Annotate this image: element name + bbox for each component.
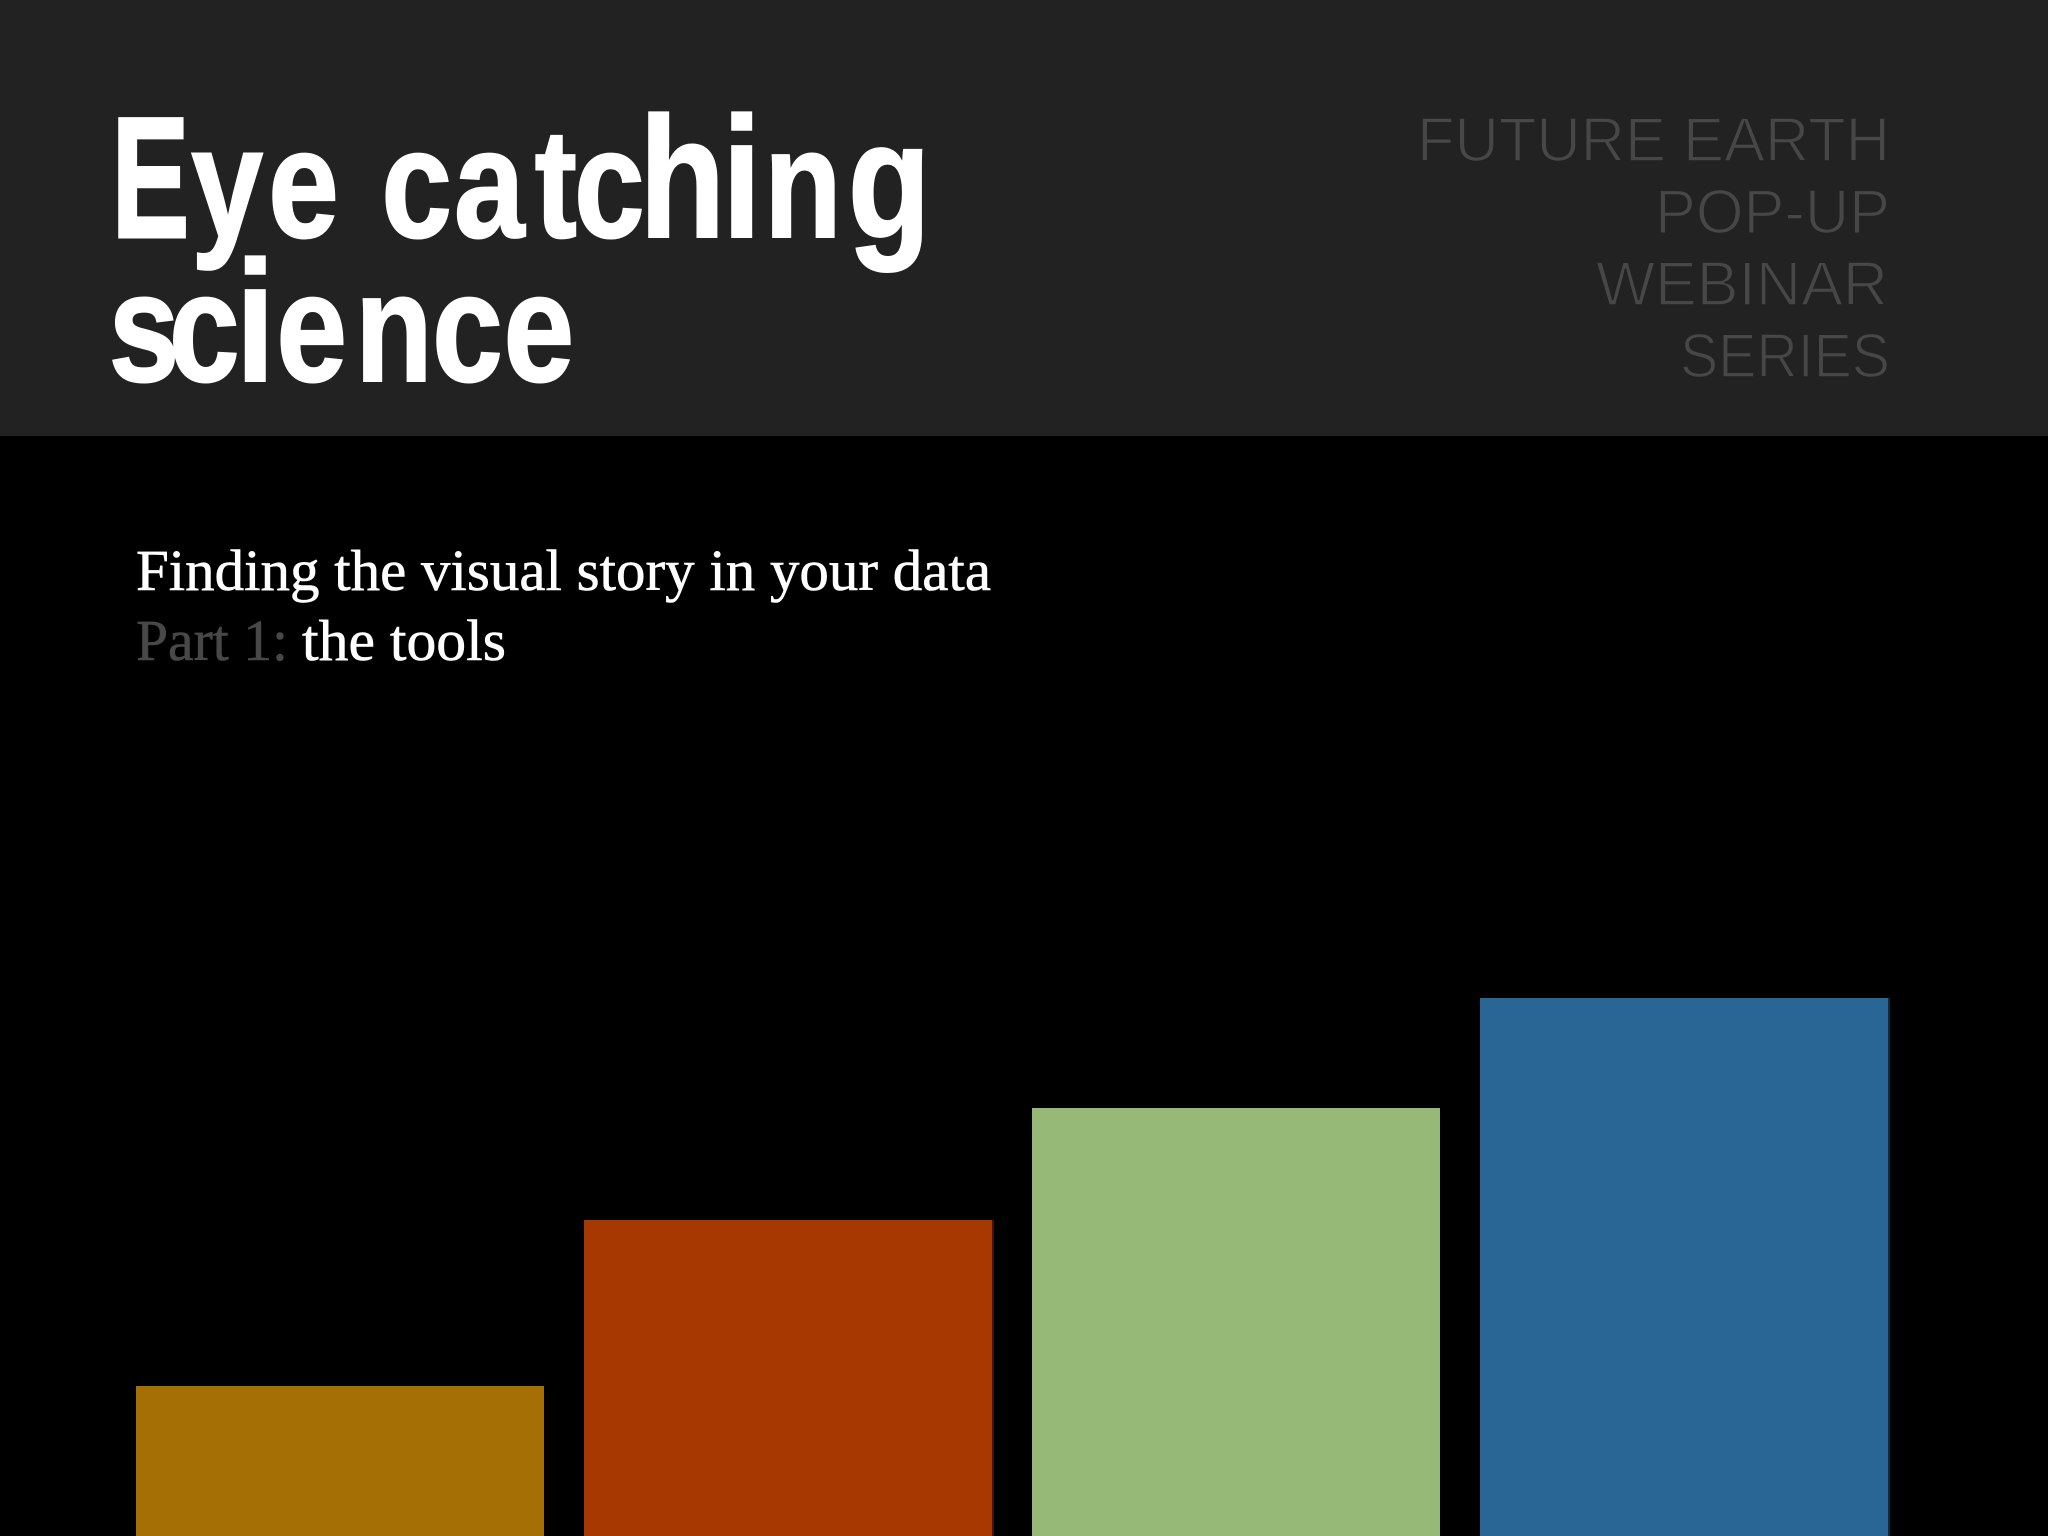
title line 2: e xyxy=(276,242,347,415)
bar 2: rust xyxy=(584,1220,992,1536)
bar 1: ochre xyxy=(136,1386,544,1536)
title line 2: i xyxy=(236,227,275,418)
title line 1: remainder: e xyxy=(268,98,339,271)
title line 1: remainder: c xyxy=(381,98,452,271)
bar 3: green xyxy=(1032,1108,1440,1536)
title line 2: s xyxy=(109,242,179,415)
title line 1: remainder: y xyxy=(191,94,263,271)
subtitle line 2: part label: Part 1: xyxy=(136,608,288,673)
series label line 4: SERIES xyxy=(1680,322,1890,391)
title xyxy=(109,83,931,418)
subtitle line 2: the tools: the tools xyxy=(302,608,506,673)
subtitle line 1: Finding the visual story in your data xyxy=(136,538,991,603)
title line 2: e xyxy=(503,242,574,415)
series label line 3: WEBINAR xyxy=(1596,250,1888,319)
bar 4: blue xyxy=(1480,998,1888,1536)
title line 2: n xyxy=(355,242,433,415)
title line 1: remainder: h xyxy=(639,83,725,274)
subtitle xyxy=(136,538,991,673)
title line 1: remainder: c xyxy=(574,98,645,271)
bar chart xyxy=(136,998,1890,1536)
title line 1: initial capital: E xyxy=(111,83,189,274)
series label line 2: POP-UP xyxy=(1655,178,1890,247)
title line 1: remainder: n xyxy=(764,98,842,271)
title line 2: c xyxy=(432,242,503,415)
series label line 1: FUTURE EARTH xyxy=(1417,106,1890,175)
header band xyxy=(0,0,2048,436)
title line 1: remainder: a xyxy=(454,98,526,271)
title line 1: remainder: g xyxy=(848,87,931,272)
title line 1: remainder: t xyxy=(535,98,577,271)
title line 2: c xyxy=(169,242,240,415)
series label xyxy=(1417,106,1890,391)
title line 1: remainder: i xyxy=(722,83,761,274)
